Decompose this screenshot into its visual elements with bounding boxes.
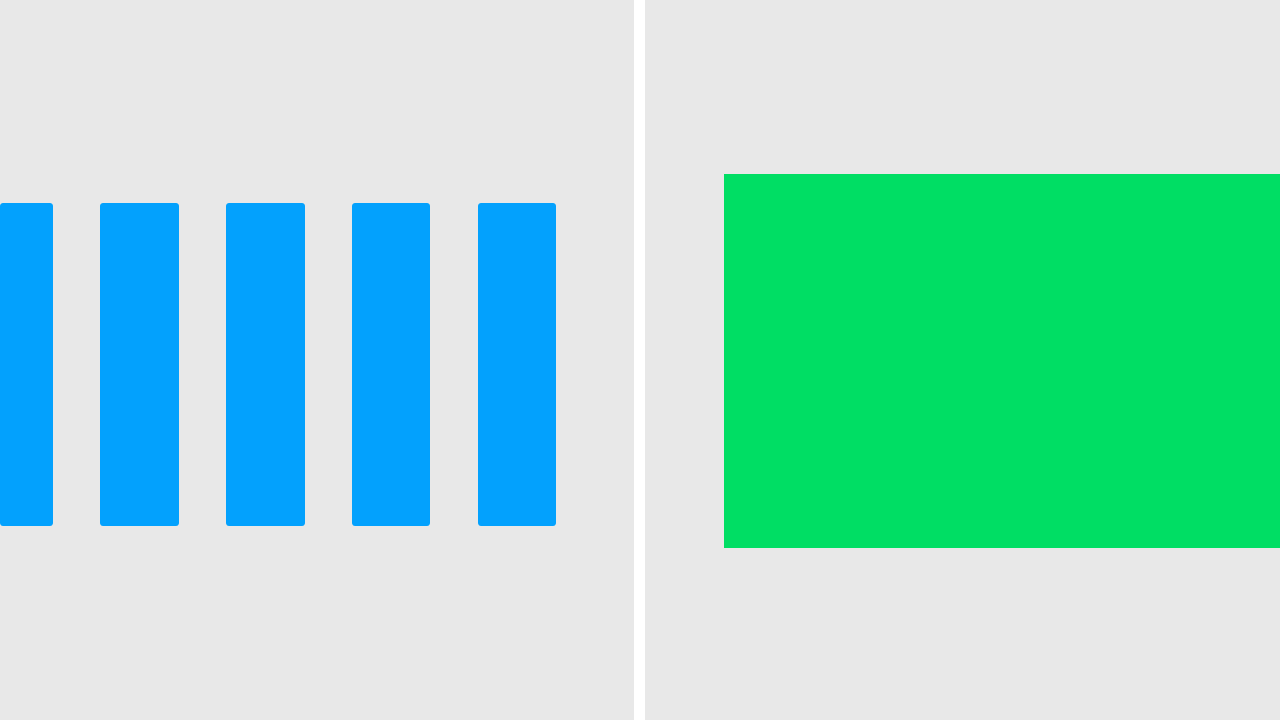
- panel: green rectangle: [724, 174, 1280, 548]
- bar 4: [352, 203, 430, 526]
- bar 3: [226, 203, 305, 526]
- bar 1: [0, 203, 53, 526]
- divider: [634, 0, 645, 720]
- panel: left bars: [0, 203, 556, 526]
- bar 2: [100, 203, 179, 526]
- bar 5: [478, 203, 556, 526]
